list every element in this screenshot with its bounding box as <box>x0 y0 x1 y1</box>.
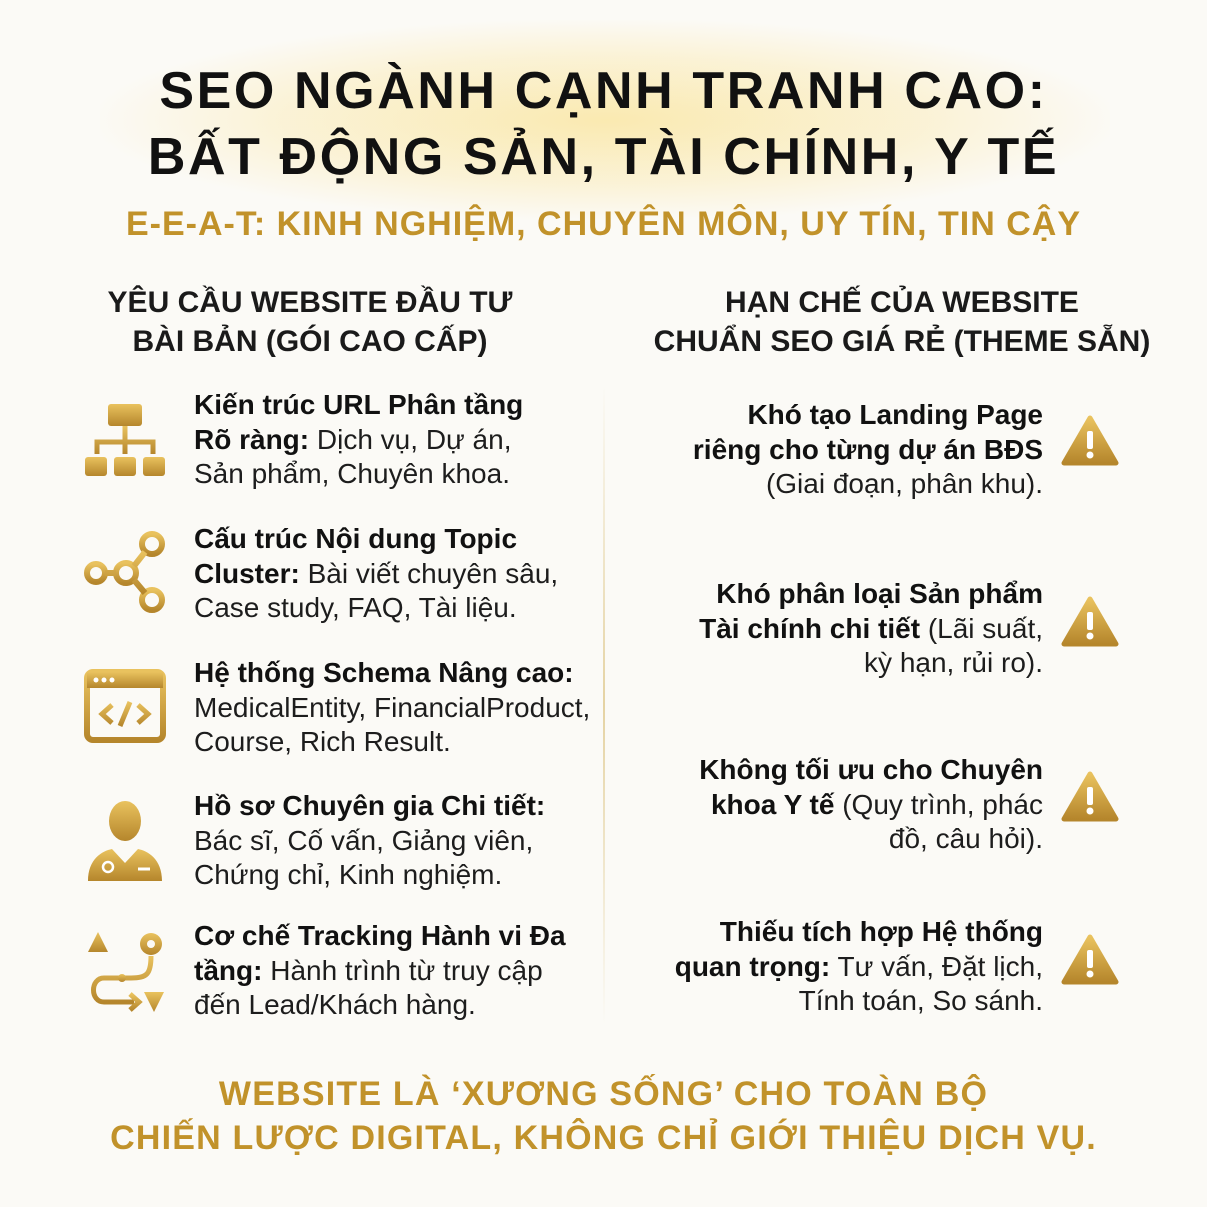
item: tracking: Cơ chế Tracking Hành vi Đa <box>194 920 566 951</box>
heading: right column: CHUẨN SEO GIÁ RẺ (THEME SẴN) <box>654 325 1150 358</box>
icon: tracking path <box>88 932 164 1012</box>
item: schema <box>194 657 590 757</box>
item: tracking <box>194 920 566 1020</box>
icon: doctor <box>88 801 162 881</box>
item: landing page <box>693 399 1043 499</box>
item: topic cluster <box>194 523 558 623</box>
item: medical: đồ, câu hỏi). <box>889 823 1043 854</box>
item: URL architecture: Sản phẩm, Chuyên khoa. <box>194 458 510 489</box>
icon: warning 1 <box>1062 416 1118 466</box>
item: expert profile: Bác sĩ, Cố vấn, Giảng viên, <box>194 824 533 856</box>
item: medical: Không tối ưu cho Chuyên <box>699 754 1043 785</box>
title: SEO NGÀNH CẠNH TRANH CAO: <box>159 62 1048 120</box>
item: financial products <box>699 578 1043 678</box>
heading: left column: YÊU CẦU WEBSITE ĐẦU TƯ <box>108 286 512 319</box>
item: tracking: tầng: Hành trình từ truy cập <box>194 954 543 986</box>
item: landing page: riêng cho từng dự án BĐS <box>693 434 1043 464</box>
item: landing page: Khó tạo Landing Page <box>747 399 1043 430</box>
footer conclusion <box>110 1074 1097 1157</box>
item: URL architecture: Rõ ràng: Dịch vụ, Dự án, <box>194 424 511 454</box>
title: BẤT ĐỘNG SẢN, TÀI CHÍNH, Y TẾ <box>148 128 1059 186</box>
heading: right column <box>654 286 1150 358</box>
item: financial products: Khó phân loại Sản phẩm <box>716 578 1043 609</box>
title <box>148 62 1059 186</box>
item: expert profile: Hồ sơ Chuyên gia Chi tiết: <box>194 790 545 821</box>
item: integrations: Thiếu tích hợp Hệ thống <box>720 916 1043 947</box>
item: financial products: Tài chính chi tiết (Lãi suất, <box>699 612 1043 644</box>
item: topic cluster: Cấu trúc Nội dung Topic <box>194 523 517 554</box>
icon: cluster <box>84 531 165 613</box>
icon: warning 4 <box>1062 934 1118 984</box>
item: expert profile <box>194 790 545 890</box>
icon: warning 3 <box>1062 772 1118 822</box>
heading: left column: BÀI BẢN (GÓI CAO CẤP) <box>132 325 488 358</box>
item: schema: MedicalEntity, FinancialProduct, <box>194 692 590 722</box>
item: topic cluster: Case study, FAQ, Tài liệu. <box>194 592 517 623</box>
item: integrations: quan trọng: Tư vấn, Đặt lịch, <box>675 950 1043 982</box>
heading: right column: HẠN CHẾ CỦA WEBSITE <box>725 286 1079 319</box>
item: schema: Course, Rich Result. <box>194 726 451 757</box>
icon: warning 2 <box>1062 596 1118 646</box>
item: schema: Hệ thống Schema Nâng cao: <box>194 657 574 688</box>
footer conclusion: WEBSITE LÀ ‘XƯƠNG SỐNG’ CHO TOÀN BỘ <box>219 1075 988 1113</box>
item: medical: khoa Y tế (Quy trình, phác <box>711 788 1043 820</box>
item: URL architecture <box>194 389 523 489</box>
item: integrations <box>675 916 1043 1016</box>
item: integrations: Tính toán, So sánh. <box>799 985 1043 1016</box>
item: financial products: kỳ hạn, rủi ro). <box>864 647 1043 678</box>
item: topic cluster: Cluster: Bài viết chuyên sâu, <box>194 558 558 588</box>
footer conclusion: CHIẾN LƯỢC DIGITAL, KHÔNG CHỈ GIỚI THIỆU DỊCH VỤ. <box>110 1119 1097 1157</box>
item: medical <box>699 754 1043 854</box>
item: URL architecture: Kiến trúc URL Phân tầng <box>194 389 523 420</box>
icon: hierarchy <box>85 404 165 476</box>
item: tracking: đến Lead/Khách hàng. <box>194 989 476 1020</box>
subtitle: E-E-A-T: KINH NGHIỆM, CHUYÊN MÔN, UY TÍN, TIN CẬY <box>126 205 1081 243</box>
heading: left column <box>108 285 512 358</box>
icon: code window <box>84 669 166 743</box>
item: landing page: (Giai đoạn, phân khu). <box>766 468 1043 499</box>
item: expert profile: Chứng chỉ, Kinh nghiệm. <box>194 859 502 890</box>
